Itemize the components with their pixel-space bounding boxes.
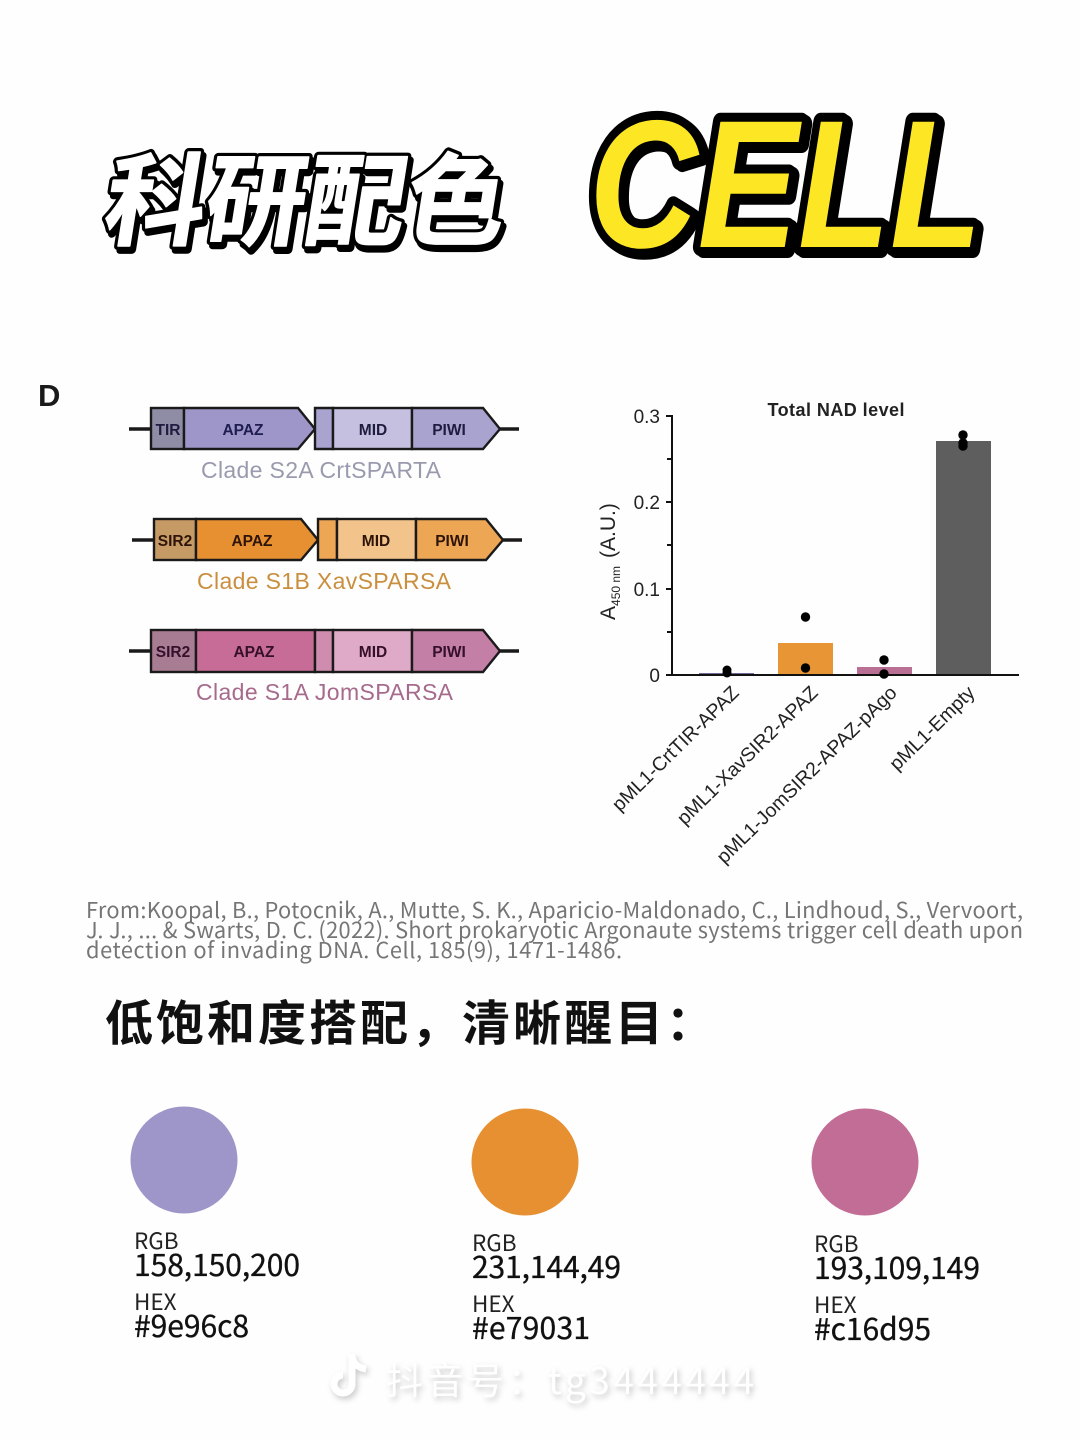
- gene: Clade S1B XavSPARSA: APAZ: [231, 533, 273, 550]
- gene: Clade S2A CrtSPARTA: MID: [359, 422, 387, 439]
- title: 科研配色: 科研配色: [96, 121, 519, 266]
- gene: Clade S2A CrtSPARTA: Clade S2A CrtSPARTA: [201, 457, 442, 483]
- gene: Clade S1A JomSPARSA: APAZ: [233, 644, 275, 661]
- citation text: detection of invading DNA. Cell, 185(9), 1471-1486.: [86, 934, 622, 965]
- title: 科研配色: 科研配色: [99, 125, 522, 270]
- swatch: orange: #e79031: [472, 1304, 590, 1348]
- swatch: purple: 158,150,200: [134, 1241, 300, 1285]
- swatch: purple: RGB: [134, 1224, 179, 1256]
- gene: Clade S2A CrtSPARTA: [129, 408, 519, 483]
- x axis category labels: pML1-Empty: [885, 682, 980, 775]
- x axis category labels: [608, 682, 980, 868]
- x axis category labels: pML1-XavSIR2-APAZ: [673, 682, 823, 829]
- x axis category labels: pML1-CrtTIR-APAZ: [608, 682, 744, 816]
- y axis label: 450 nm: [609, 566, 623, 606]
- y axis label: A: [597, 606, 620, 620]
- swatch: pink: [812, 1108, 980, 1349]
- swatch: orange: 231,144,49: [472, 1243, 621, 1287]
- citation text: J. J., ... & Swarts, D. C. (2022). Short prokaryotic Argonaute systems trigger cell death upon: [86, 914, 1023, 945]
- gene: Clade S1A JomSPARSA: PIWI: [432, 644, 466, 661]
- swatch: orange: HEX: [472, 1287, 515, 1319]
- swatch: pink: #c16d95: [814, 1305, 931, 1349]
- gene: Clade S1A JomSPARSA: [129, 630, 519, 705]
- panel label: D: D: [38, 378, 60, 413]
- watermark text: 抖音号：tg3444444: [386, 1351, 754, 1405]
- swatch: pink: HEX: [814, 1288, 857, 1320]
- gene: Clade S2A CrtSPARTA: PIWI: [432, 422, 466, 439]
- y axis ticks: 0: [649, 666, 660, 687]
- y axis label: (A.U.): [597, 503, 620, 558]
- title: CELL: CELL: [589, 82, 982, 286]
- heading: 低饱和度搭配，清晰醒目：: 低饱和度搭配，清晰醒目：: [105, 984, 717, 1054]
- swatch: purple: [130, 1106, 300, 1346]
- citation text: From:Koopal, B., Potocnik, A., Mutte, S. K., Aparicio-Maldonado, C., Lindhoud, S., Vervoort,: [86, 894, 1023, 925]
- swatch: purple: HEX: [134, 1285, 177, 1317]
- gene: Clade S1B XavSPARSA: SIR2: [158, 533, 192, 550]
- title: 科研配色: 科研配色: [96, 121, 519, 266]
- bar chart: Total NAD level: [597, 400, 1019, 868]
- y axis ticks: [634, 407, 660, 687]
- gene: Clade S1A JomSPARSA: SIR2: [156, 644, 190, 661]
- y axis ticks: 0.1: [634, 580, 660, 601]
- gene: Clade S2A CrtSPARTA: TIR: [156, 422, 180, 439]
- gene: Clade S1A JomSPARSA: MID: [359, 644, 387, 661]
- gene: Clade S1B XavSPARSA: Clade S1B XavSPARSA: [197, 568, 452, 594]
- swatch: pink: RGB: [814, 1227, 859, 1259]
- swatch: pink: 193,109,149: [814, 1244, 980, 1288]
- swatch: purple: #9e96c8: [134, 1302, 249, 1346]
- title: CELL: CELL: [589, 82, 982, 286]
- axes: [666, 415, 1019, 676]
- y axis ticks: 0.3: [634, 407, 660, 428]
- chart title: Total NAD level: [768, 400, 904, 420]
- y axis ticks: 0.2: [634, 493, 660, 514]
- gene: Clade S1B XavSPARSA: MID: [362, 533, 390, 550]
- swatch: orange: RGB: [472, 1226, 517, 1258]
- gene: Clade S1B XavSPARSA: PIWI: [435, 533, 469, 550]
- data points: [722, 430, 968, 679]
- swatch: orange: [472, 1108, 621, 1348]
- citation text: [86, 894, 1023, 965]
- bars: [699, 441, 991, 675]
- icon: music note: [334, 1354, 366, 1393]
- gene: Clade S2A CrtSPARTA: APAZ: [222, 422, 264, 439]
- watermark: [334, 1351, 754, 1405]
- panel: gene diagrams: [129, 408, 522, 705]
- x axis category labels: pML1-JomSIR2-APAZ-pAgo: [712, 682, 902, 868]
- gene: Clade S1B XavSPARSA: [132, 519, 522, 594]
- title: CELL: CELL: [592, 84, 985, 288]
- gene: Clade S1A JomSPARSA: Clade S1A JomSPARSA: [196, 679, 454, 705]
